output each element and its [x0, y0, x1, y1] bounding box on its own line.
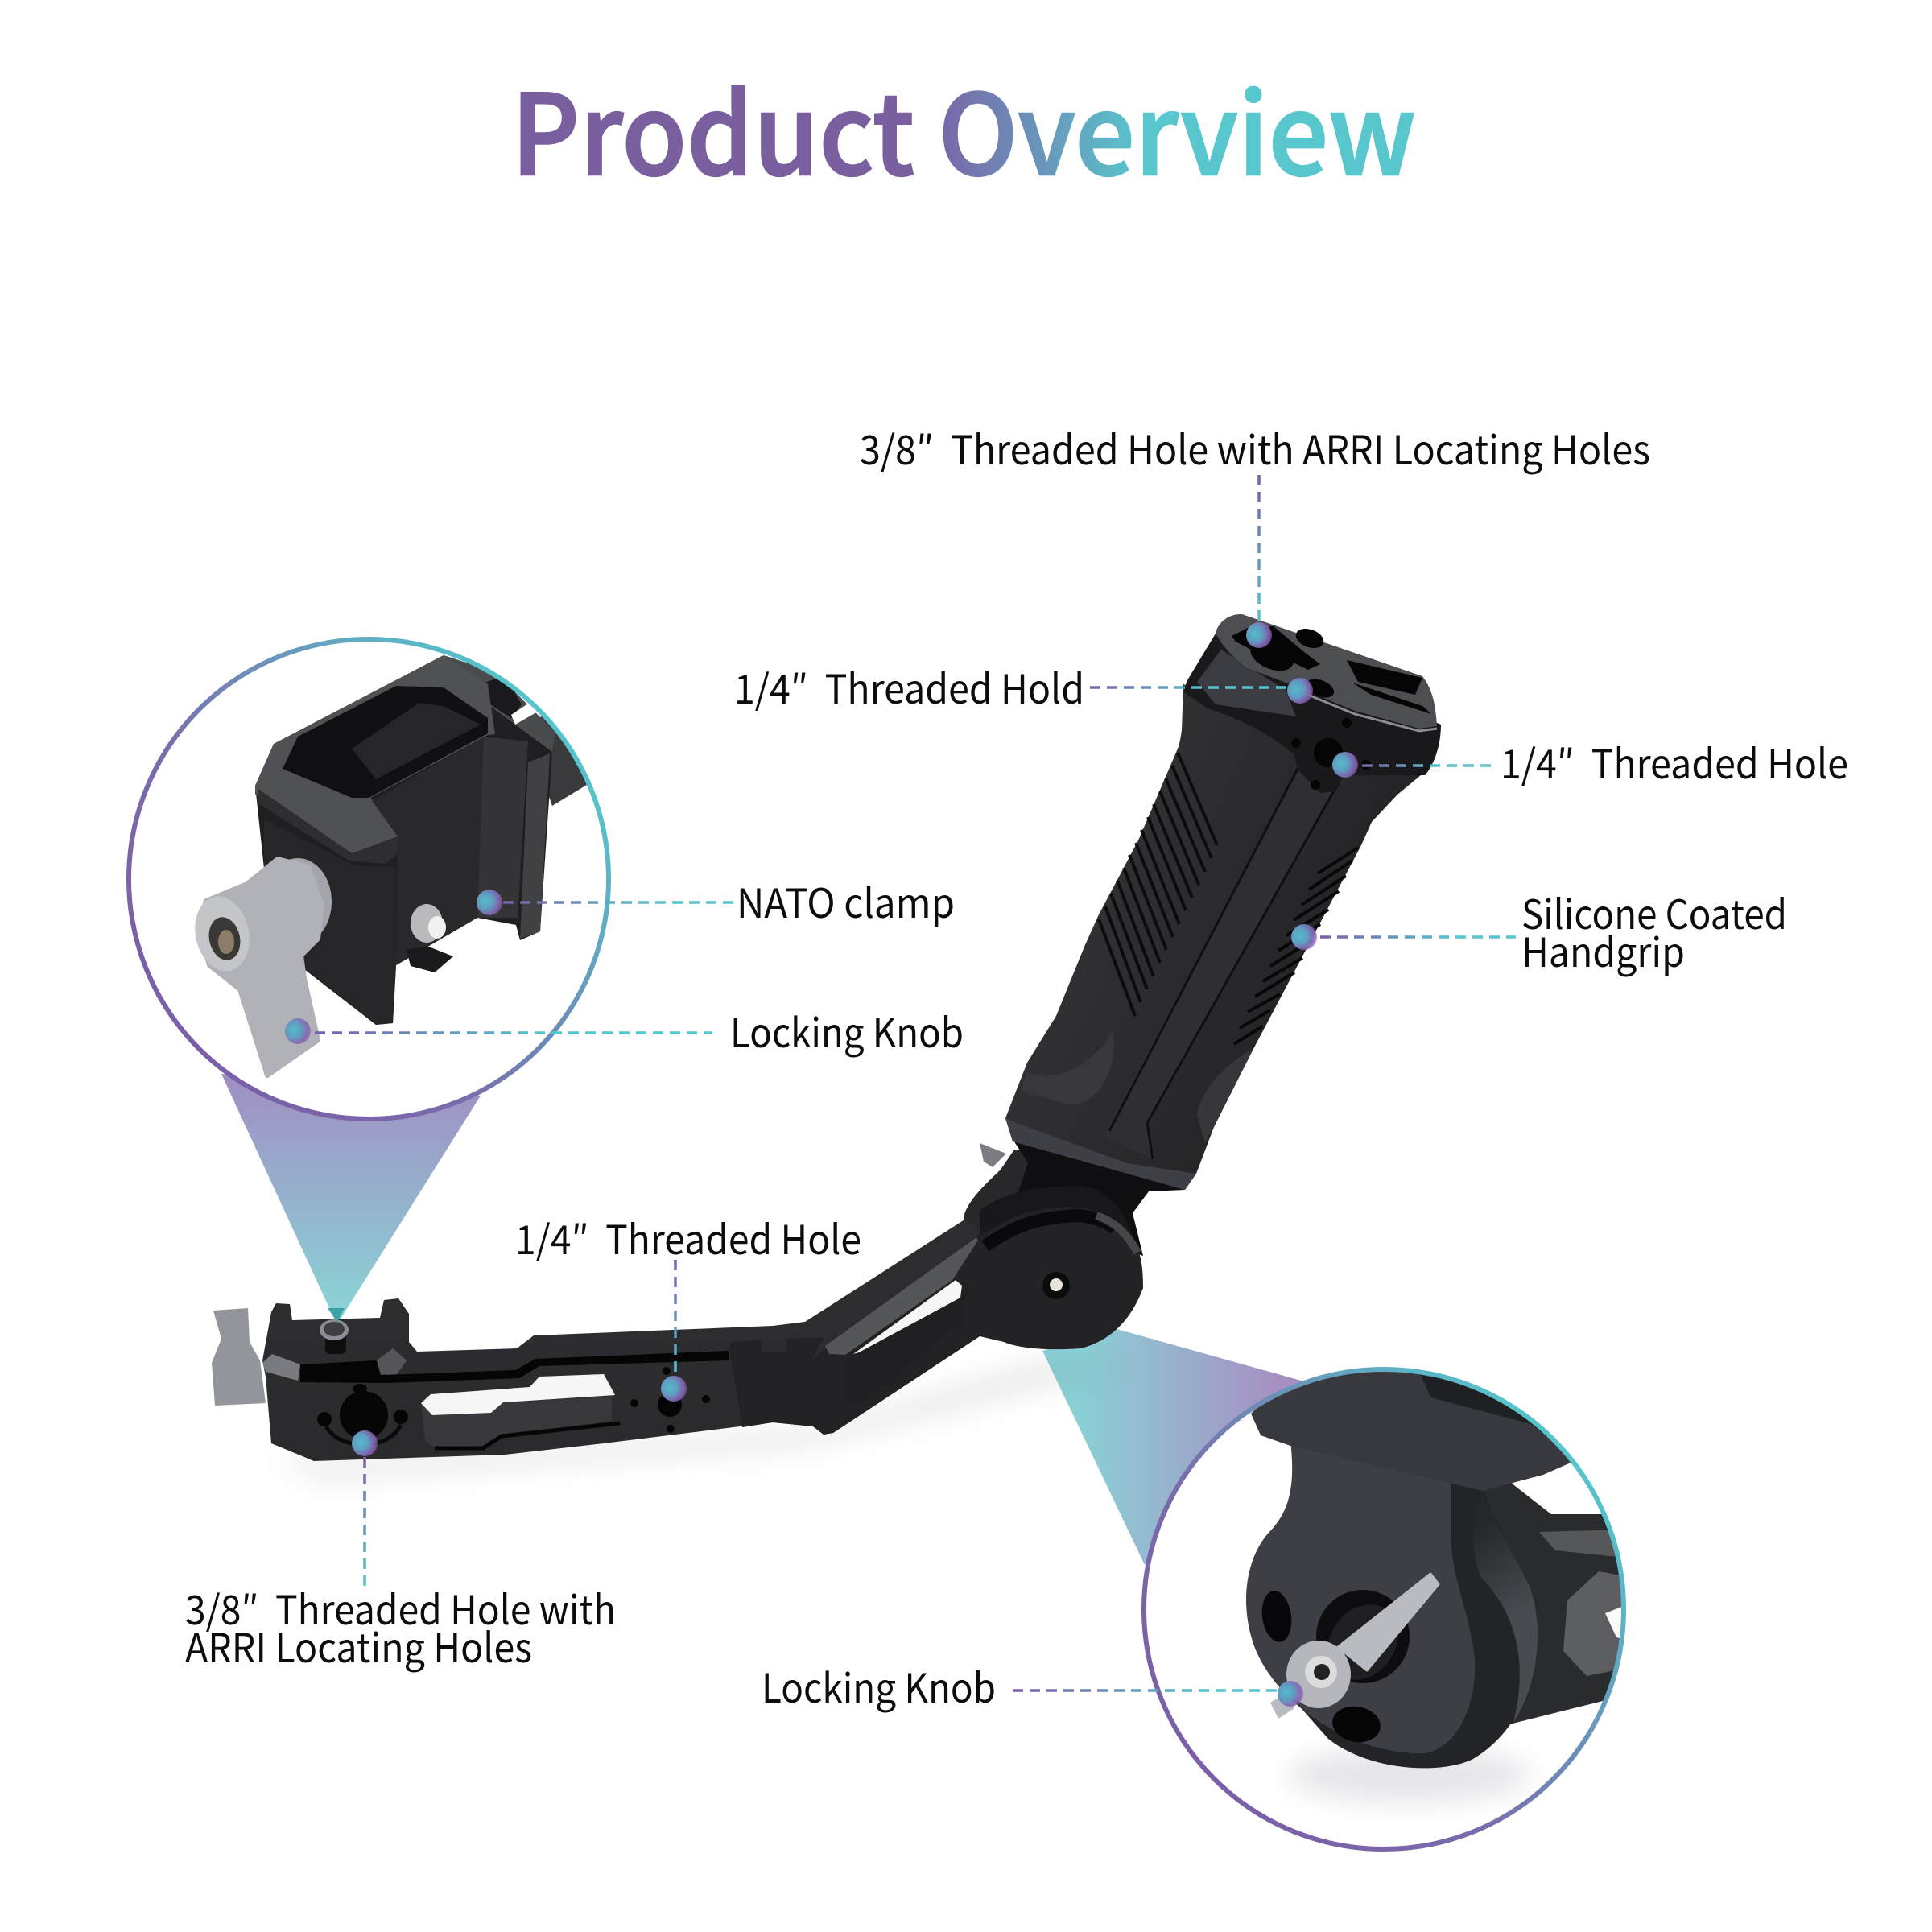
pivot disc bevel	[985, 1216, 1115, 1246]
pivot artwork	[1246, 1360, 1634, 1803]
disc oval holes	[1262, 1591, 1291, 1642]
clamp right panel	[477, 737, 528, 918]
silver knob	[198, 859, 322, 1075]
clamp front ledge	[257, 789, 398, 864]
arm bevel	[1539, 1530, 1615, 1557]
disc main plate	[1246, 1441, 1475, 1753]
grip cap side highlight	[1197, 650, 1296, 716]
clamp front panel	[372, 737, 484, 965]
arm chamfer	[262, 1354, 300, 1381]
grip thumb recess right	[1197, 1049, 1253, 1143]
grip center spine	[1103, 767, 1340, 1159]
knob face hole	[209, 917, 240, 960]
pivot back plate	[964, 1150, 1046, 1232]
clamp body	[255, 655, 555, 1025]
lower slot floor	[421, 1397, 612, 1447]
circle ring	[129, 639, 609, 1119]
pivot center bolt	[1042, 1272, 1070, 1299]
knob face ring	[195, 897, 250, 971]
clamp lower front face	[306, 966, 396, 1025]
clamp top face	[255, 655, 495, 855]
diagonal slot opening	[853, 1280, 962, 1354]
arm holes	[317, 1367, 710, 1445]
product: handgrip	[1005, 614, 1441, 1190]
wing tail	[1270, 1698, 1294, 1719]
rubber top	[1420, 1375, 1547, 1437]
grip block	[1251, 1372, 1571, 1491]
center bolt	[1305, 1656, 1337, 1688]
product: pivot disc	[952, 1139, 1185, 1349]
cap holes	[1232, 625, 1431, 790]
grip base edge	[1005, 1118, 1196, 1190]
label: 1/4 threaded hole right: 1/4″ Threaded Hole	[1501, 733, 1848, 791]
pivot black block	[1013, 1139, 1185, 1256]
pivot disc rim highlight	[1096, 1216, 1137, 1253]
leader: 3/8 hole arm	[363, 1457, 366, 1590]
right arm	[1484, 1483, 1619, 1724]
diagonal slot floor	[843, 1278, 968, 1403]
label: NATO clamp: NATO clamp	[737, 872, 955, 930]
clamp pocket window	[352, 703, 481, 779]
pin	[411, 904, 443, 943]
clamp rail	[520, 753, 550, 939]
label: 1/4 threaded hole arm: 1/4″ Threaded Hole	[515, 1208, 861, 1266]
clamp rear face	[444, 655, 555, 752]
lower slot edge	[435, 1423, 620, 1448]
wing lever	[1338, 1574, 1439, 1670]
diagonal bevel	[825, 1237, 985, 1355]
arm front groove	[300, 1351, 729, 1383]
panel: locking knob zoom	[1142, 1360, 1634, 1851]
leader: top 3/8 hole	[1257, 475, 1261, 628]
label: 3/8 threaded hole arm: 3/8″ Threaded Hole with	[185, 1579, 616, 1637]
label: silicone coated handgrip: Handgrip	[1521, 921, 1685, 979]
silver knob on arm end	[212, 1308, 266, 1406]
label: 3/8 threaded hole arm: ARRI Locating Holes	[185, 1616, 532, 1674]
pivot disc rim	[980, 1186, 1143, 1336]
diagonal arm plate	[811, 1234, 985, 1435]
label: top 3/8 threaded hole: 3/8″ Threaded Hole with ARRI Locating Holes	[860, 419, 1650, 477]
grip cap top face	[1216, 614, 1437, 729]
pivot wing	[980, 1143, 1006, 1167]
label: silicone coated handgrip: Silicone Coated	[1521, 883, 1787, 941]
rear slot	[485, 679, 522, 718]
disc outer band	[1301, 1483, 1510, 1768]
leader: 1/4 threaded hole right	[1362, 764, 1491, 767]
leader: locking knob upper	[315, 1031, 712, 1034]
hotspot markers	[285, 622, 1358, 1707]
arm slot	[1563, 1571, 1621, 1676]
pivot disc face	[952, 1207, 1143, 1349]
label: locking knob upper: Locking Knob	[730, 1001, 964, 1059]
label: silicone coated handgrip	[1521, 883, 1787, 979]
NATO notch block	[729, 1338, 824, 1427]
leader: 1/4 threaded hold	[1090, 686, 1288, 689]
grip left ridges	[1099, 753, 1217, 1016]
grip thumb recess left	[1021, 1029, 1114, 1104]
title: Product Overview	[511, 46, 1416, 207]
pin tab	[407, 946, 453, 972]
label: locking knob lower: Locking Knob	[762, 1657, 996, 1715]
leader: NATO clamp	[503, 901, 737, 904]
label: 3/8 threaded hole arm	[185, 1579, 616, 1674]
clamp pocket	[283, 686, 488, 798]
arm body	[262, 1210, 1119, 1461]
zoom cone: pivot detail	[1042, 1329, 1304, 1565]
clamp artwork	[188, 655, 620, 1075]
knob cylinder	[289, 858, 332, 934]
leader: handgrip	[1320, 935, 1516, 939]
product: gimbal arm	[212, 1210, 1119, 1461]
circle background	[1142, 1368, 1625, 1851]
arm slot opening	[1605, 1607, 1621, 1638]
label: 1/4 threaded hold: 1/4″ Threaded Hold	[734, 658, 1084, 716]
grip rubber body	[1005, 684, 1426, 1190]
leader: 1/4 hole arm	[674, 1260, 677, 1378]
circle background	[127, 638, 610, 1121]
circle ring	[1144, 1369, 1624, 1849]
grip right ridges	[1234, 848, 1358, 1044]
zoom cone: clamp detail	[221, 1074, 481, 1320]
arm top screw	[320, 1308, 349, 1354]
leader: locking knob lower	[1013, 1689, 1280, 1692]
rear bar	[540, 716, 587, 806]
lower slot opening	[421, 1374, 615, 1415]
panel: NATO clamp zoom	[127, 638, 620, 1121]
disc large hole	[1316, 1590, 1410, 1683]
disc lit ridge	[1473, 1528, 1538, 1723]
arm block chamfer	[377, 1348, 407, 1375]
grip metal cap body	[1184, 634, 1441, 793]
wing ring	[1286, 1641, 1351, 1708]
product shadow	[274, 1360, 1127, 1481]
grip cap edge highlight	[1296, 690, 1437, 731]
floor shadow	[1288, 1747, 1530, 1803]
rear slot opening	[511, 704, 536, 724]
